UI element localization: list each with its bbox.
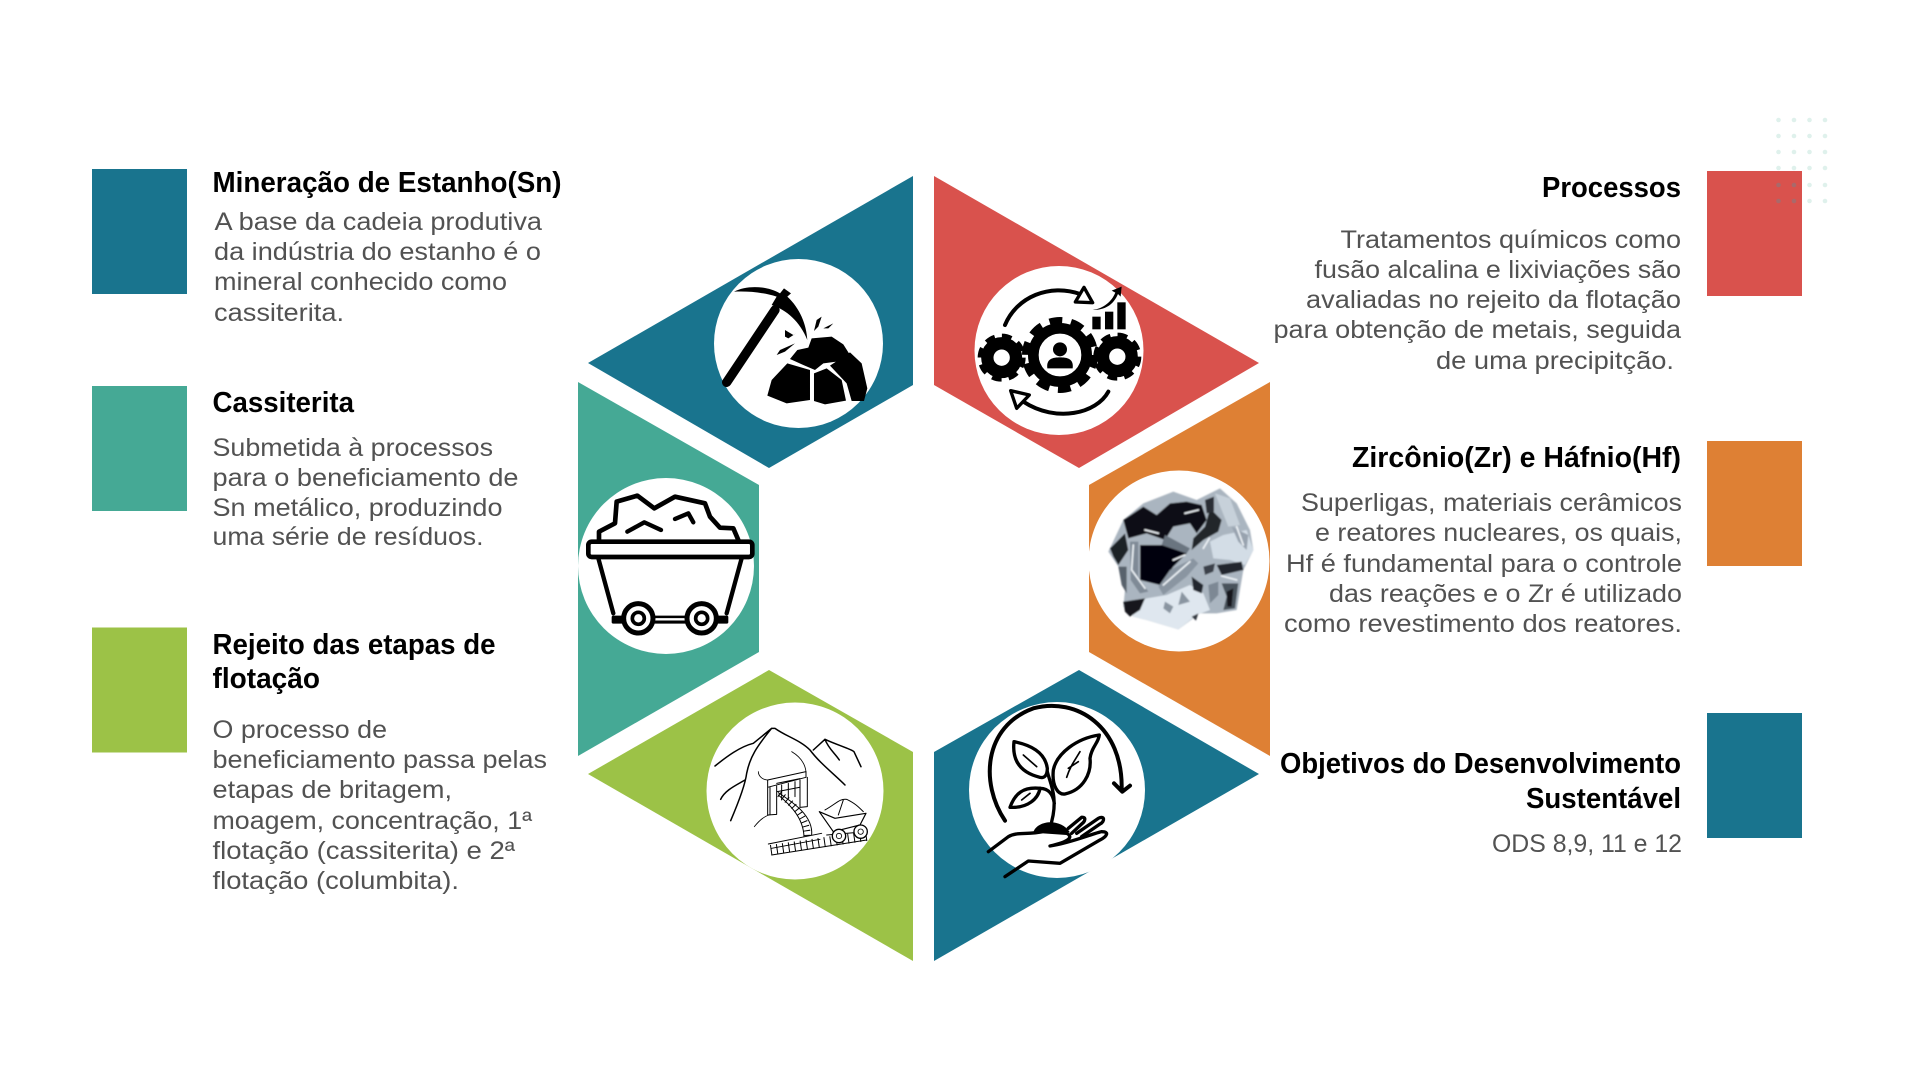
text block: Processos: para obtenção de metais, seguida: [1274, 316, 1681, 344]
text block: Cassiterita: Cassiterita: [212, 387, 355, 419]
icon circle: pickaxe and rocks: [714, 259, 883, 428]
text block: Rejeito das etapas de flotação: O processo de: [212, 716, 387, 744]
text block: Rejeito das etapas de flotação: flotação: [212, 663, 320, 695]
text block: Rejeito das etapas de flotação: moagem, concentração, 1ª: [212, 807, 533, 835]
text block: Cassiterita: uma série de resíduos.: [212, 523, 484, 551]
text block: Rejeito das etapas de flotação: flotação (columbita).: [212, 867, 459, 895]
hexagon segment: processos: [934, 176, 1259, 468]
text block: Rejeito das etapas de flotação: etapas de britagem,: [212, 776, 452, 804]
legend square: rejeito: [92, 628, 187, 752]
hexagon segment: zircônio e háfnio: [1089, 382, 1270, 756]
text block: Rejeito das etapas de flotação: beneficiamento passa pelas: [212, 746, 547, 774]
text block: Mineração de Estanho: A base da cadeia produtiva: [214, 208, 542, 236]
text block: Mineração de Estanho: cassiterita.: [214, 299, 344, 327]
text block: Rejeito das etapas de flotação: Rejeito das etapas de: [212, 629, 496, 661]
icon circle: gears and cycle arrows: [974, 266, 1144, 435]
text block: Objetivos do Desenvolvimento Sustentável: Sustentável: [1526, 783, 1681, 815]
text block: Zircônio e Háfnio: Zircônio(Zr) e Háfnio(Hf): [1352, 442, 1681, 474]
legend square: processos: [1707, 171, 1802, 296]
text block: Mineração de Estanho: [212, 167, 562, 327]
text block: Zircônio e Háfnio: [1284, 442, 1682, 638]
text block: Cassiterita: Sn metálico, produzindo: [212, 494, 502, 522]
text block: Processos: Tratamentos químicos como: [1340, 226, 1681, 254]
icon circle: plant in hand: [969, 702, 1145, 878]
decorative dot grid: [1776, 118, 1827, 203]
icon circle: mine cart with ore: [578, 478, 754, 654]
legend square: zircônio e háfnio: [1707, 441, 1802, 566]
text block: Objetivos do Desenvolvimento Sustentável: [1280, 748, 1682, 858]
text block: Cassiterita: para o beneficiamento de: [212, 464, 518, 492]
hexagon segment: cassiterita: [578, 382, 759, 756]
text block: Processos: Processos: [1542, 172, 1681, 204]
hexagon segment: ODS: [934, 670, 1259, 961]
text block: Zircônio e Háfnio: Hf é fundamental para o controle: [1286, 550, 1682, 578]
hexagon segment: mineração: [588, 176, 913, 468]
text block: Rejeito das etapas de flotação: [212, 629, 547, 895]
text block: Cassiterita: Submetida à processos: [212, 434, 493, 462]
text block: Processos: avaliadas no rejeito da flotação: [1306, 286, 1681, 314]
text block: Zircônio e Háfnio: das reações e o Zr é utilizado: [1329, 580, 1682, 608]
text block: Zircônio e Háfnio: como revestimento dos reatores.: [1284, 610, 1682, 638]
icon circle: crumpled metal: [1088, 470, 1270, 652]
icon circle: mine entrance and rails: [706, 702, 884, 880]
legend square: ODS: [1707, 713, 1802, 838]
text block: Mineração de Estanho: da indústria do estanho é o: [214, 238, 541, 266]
text block: Rejeito das etapas de flotação: flotação (cassiterita) e 2ª: [212, 837, 516, 865]
text block: Processos: de uma precipitção.: [1436, 347, 1674, 375]
text block: Cassiterita: [212, 387, 518, 551]
text block: Objetivos do Desenvolvimento Sustentável: ODS 8,9, 11 e 12: [1492, 830, 1682, 858]
text block: Mineração de Estanho: mineral conhecido como: [214, 268, 507, 296]
text block: Processos: fusão alcalina e lixiviações são: [1314, 256, 1681, 284]
legend square: mineração: [92, 169, 187, 294]
text block: Objetivos do Desenvolvimento Sustentável: Objetivos do Desenvolvimento: [1280, 748, 1681, 780]
text block: Zircônio e Háfnio: Superligas, materiais cerâmicos: [1301, 489, 1682, 517]
hexagon segment: rejeito: [588, 670, 913, 961]
text block: Mineração de Estanho: Mineração de Estanho(Sn): [212, 167, 562, 199]
text block: Processos: [1274, 172, 1681, 375]
text block: Zircônio e Háfnio: e reatores nucleares, os quais,: [1315, 519, 1682, 547]
legend square: cassiterita: [92, 386, 187, 511]
